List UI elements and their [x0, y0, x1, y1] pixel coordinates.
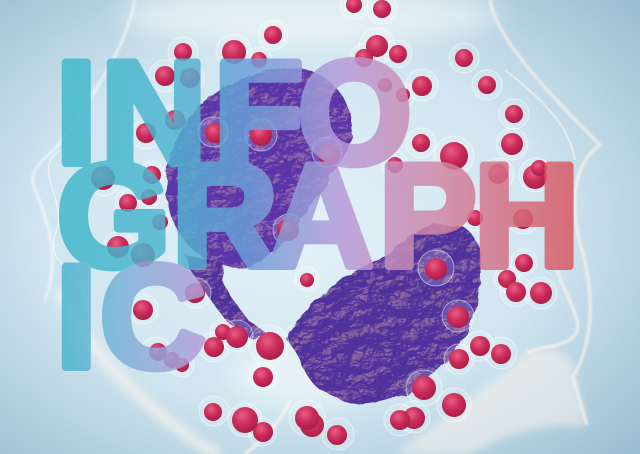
title line: GRAPH: GRAPH	[57, 134, 579, 297]
connecting stalk	[185, 255, 265, 340]
red cells with halos	[87, 0, 557, 450]
upper purple mass	[166, 67, 352, 269]
lower right cream membrane	[395, 349, 587, 454]
title line: INFO: INFO	[56, 31, 412, 194]
top glow	[120, 0, 500, 45]
lower purple mass	[287, 225, 481, 405]
title: INFOGRAPHIC	[56, 31, 579, 398]
central glow	[230, 345, 370, 405]
title line: IC: IC	[56, 235, 205, 398]
